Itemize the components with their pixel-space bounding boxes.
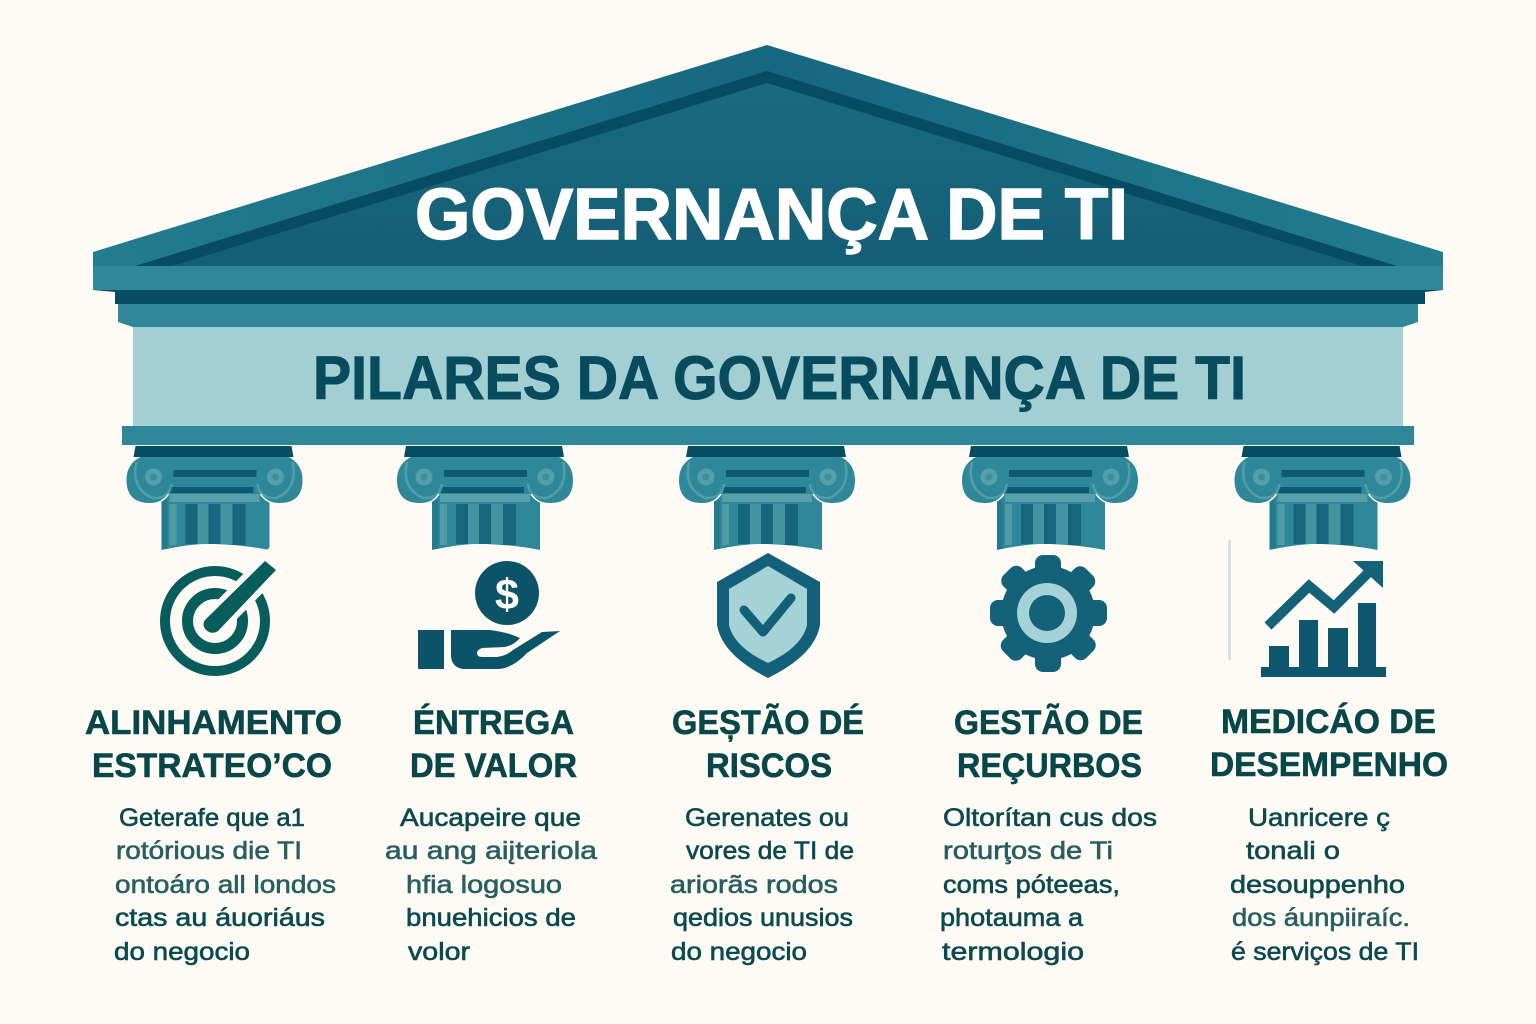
heading: gestão de riscos: RISCOS <box>706 747 832 785</box>
temple base band <box>122 426 1414 445</box>
heading: medição de desempenho: MEDICÁO DE <box>1221 703 1436 741</box>
heading: gestão de riscos <box>672 704 864 785</box>
heading: entrega de valor <box>410 704 577 785</box>
column capital 1 <box>126 446 302 550</box>
body text 1: ontoáro all londos <box>115 871 336 899</box>
body text 4: coms póteeas, <box>943 871 1120 899</box>
frieze panel <box>133 327 1403 427</box>
body text 2: au ang aiįteriola <box>385 837 597 865</box>
body text 2 <box>385 804 597 966</box>
pillar 1 text <box>85 704 342 966</box>
body text 2: bnuehicios de <box>406 904 576 932</box>
body text 1 <box>114 804 336 966</box>
body text 1: rotórious die TI <box>116 837 302 865</box>
icon: hand with coin <box>418 561 560 669</box>
heading: gestão de recursos: REÇURBOS <box>957 747 1142 785</box>
heading: alinhamento estratégico: ESTRATEO’CO <box>92 747 332 785</box>
heading: gestão de recursos: GESTÃO DE <box>954 704 1143 742</box>
icon: shield with check <box>717 553 820 678</box>
body text 1: ctas au áuoriáus <box>115 904 325 932</box>
heading: alinhamento estratégico: ALINHAMENTO <box>85 704 342 742</box>
body text 5: Uanricere ç <box>1248 804 1390 832</box>
heading: medição de desempenho: DESEMPENHO <box>1210 746 1448 784</box>
body text 3 <box>670 804 854 966</box>
icon: growth chart <box>1228 540 1386 677</box>
body text 4: roturţos de Ti <box>943 837 1113 865</box>
heading: entrega de valor: DE VALOR <box>410 747 577 785</box>
frieze heading: PILARES DA GOVERNANÇA DE TI <box>313 344 1246 412</box>
body text 5: desouppenho <box>1230 871 1405 899</box>
heading: alinhamento estratégico <box>85 704 342 785</box>
body text 1: do negocio <box>114 938 250 966</box>
column capital 5 <box>1234 446 1410 550</box>
pillar 3 text <box>670 704 864 966</box>
temple pediment <box>93 45 1443 267</box>
icon: hand with coin: $ <box>495 571 519 619</box>
body text 3: vores de TI de <box>686 837 854 865</box>
pillar 4 text <box>940 704 1157 966</box>
body text 5: é serviços de TI <box>1231 938 1419 966</box>
pillar 2 text <box>385 704 597 966</box>
body text 2: volor <box>408 938 470 966</box>
body text 3: qedios unusios <box>673 904 853 932</box>
heading: medição de desempenho <box>1210 703 1448 784</box>
body text 5 <box>1230 804 1419 966</box>
pillar 5 text <box>1210 703 1448 966</box>
body text 4: termologio <box>942 938 1084 966</box>
body text 3: Gerenates ou <box>685 804 849 832</box>
temple entablature <box>93 266 1443 327</box>
body text 3: ariorãs rodos <box>670 871 838 899</box>
icon: target <box>165 552 284 671</box>
heading: gestão de recursos <box>954 704 1143 785</box>
column capital 4 <box>962 446 1138 550</box>
body text 3: do negocio <box>671 938 807 966</box>
body text 2: Aucapeire que <box>400 804 581 832</box>
body text 2: hfia logosuo <box>406 871 562 899</box>
column capital 2 <box>397 446 573 550</box>
body text 4: photauma a <box>940 904 1083 932</box>
body text 5: dos áunpiiraíc. <box>1232 904 1410 932</box>
body text 4 <box>940 804 1157 966</box>
column capital 3 <box>679 446 855 550</box>
heading: gestão de riscos: GEȘTÃO DÉ <box>672 704 864 742</box>
main title: GOVERNANÇA DE TI <box>415 175 1128 255</box>
body text 4: Oltorítan cus dos <box>943 804 1157 832</box>
heading: entrega de valor: ÉNTREGA <box>413 704 574 742</box>
body text 1: Geterafe que a1 <box>119 804 305 832</box>
body text 5: tonali o <box>1246 837 1340 865</box>
icon: gear <box>990 555 1107 672</box>
